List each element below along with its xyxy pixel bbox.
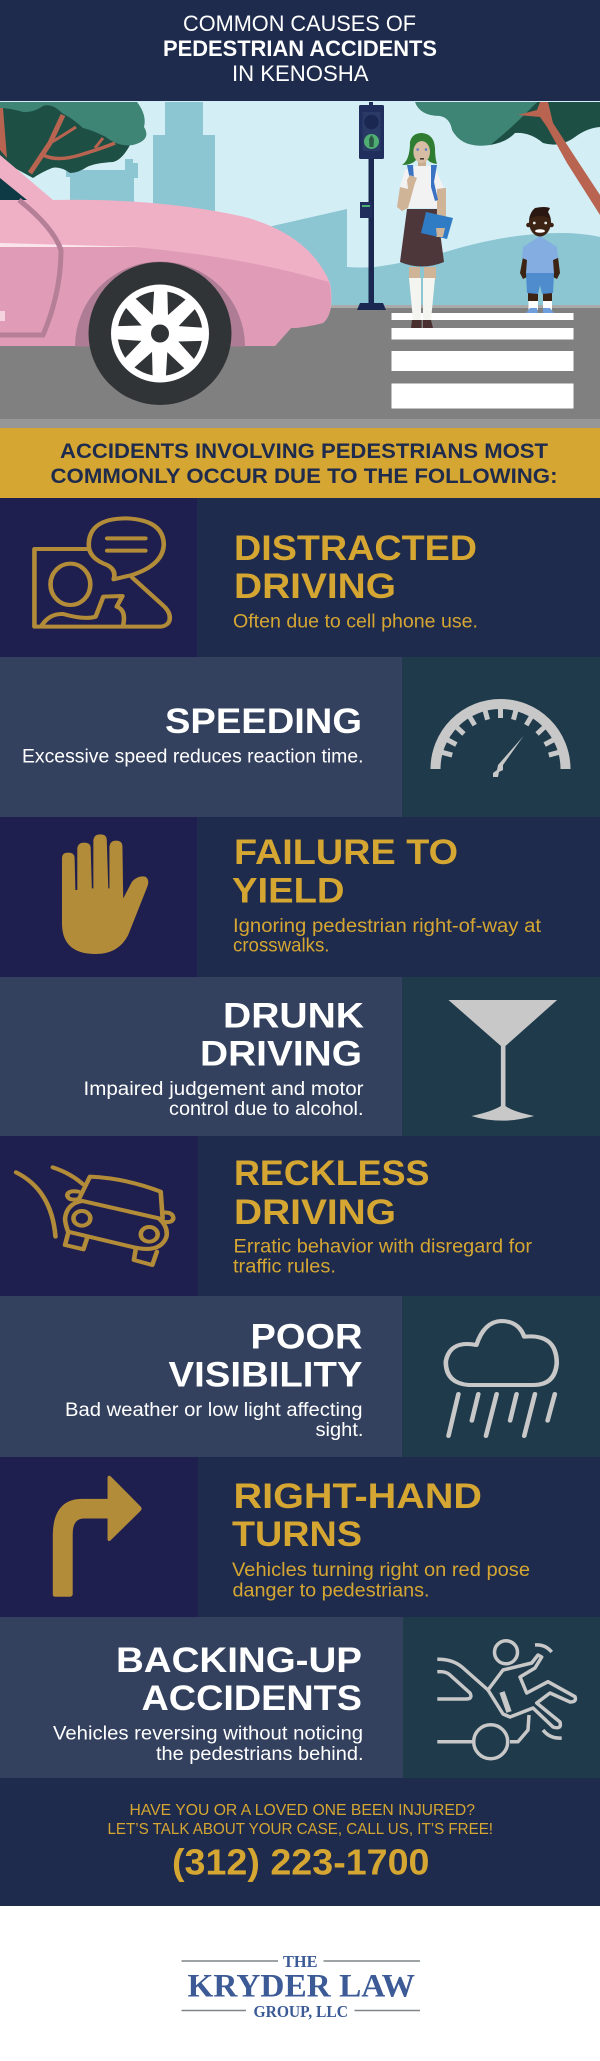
heading: distracted driving	[234, 529, 477, 606]
call to action text	[108, 1802, 493, 1838]
description: the pedestrians behind.	[156, 1744, 364, 1765]
heading: drunk driving	[200, 996, 364, 1074]
panel: backing-up accidents	[0, 1617, 600, 1778]
heading: distracted driving: DISTRACTED	[234, 529, 477, 568]
icon: rain cloud	[446, 1321, 557, 1436]
description: Often due to cell phone use.	[233, 612, 478, 632]
tree right	[415, 102, 600, 215]
title: IN KENOSHA	[232, 61, 369, 86]
boy pedestrian	[520, 207, 560, 313]
panel: poor visibility	[0, 1296, 600, 1457]
heading: backing-up accidents: ACCIDENTS	[142, 1679, 362, 1718]
heading: drunk driving: DRIVING	[200, 1034, 362, 1074]
logo: The Kryder Law Group	[182, 1952, 420, 2021]
icon: raised hand	[62, 834, 148, 954]
banner heading: COMMONLY OCCUR DUE TO THE FOLLOWING:	[50, 465, 558, 488]
woman pedestrian	[397, 133, 453, 328]
heading: right-hand turns: TURNS	[232, 1515, 362, 1554]
panel: distracted driving	[0, 498, 600, 657]
icon: swerving car	[16, 1167, 173, 1265]
description	[84, 1079, 364, 1120]
description: traffic rules.	[233, 1256, 336, 1278]
banner heading: ACCIDENTS INVOLVING PEDESTRIANS MOST	[60, 440, 548, 463]
traffic light	[357, 102, 386, 310]
heading: backing-up accidents	[116, 1641, 362, 1718]
description: Erratic behavior with disregard for	[234, 1236, 533, 1258]
heading: right-hand turns: RIGHT-HAND	[234, 1477, 482, 1516]
heading: right-hand turns	[232, 1477, 482, 1554]
icon: speedometer	[436, 704, 566, 777]
pink car	[0, 155, 331, 346]
description	[65, 1400, 364, 1441]
heading: distracted driving: DRIVING	[234, 567, 396, 606]
panel: reckless driving	[0, 1136, 600, 1296]
crosswalk	[392, 313, 574, 408]
heading: failure to yield: FAILURE TO	[234, 833, 458, 872]
gold banner	[0, 428, 600, 498]
heading: poor visibility: POOR	[250, 1318, 362, 1356]
heading: reckless driving: DRIVING	[234, 1193, 396, 1232]
phone number: (312) 223-1700	[172, 1842, 430, 1882]
description: danger to pedestrians.	[232, 1580, 430, 1602]
panel: drunk driving	[0, 977, 600, 1136]
header panel	[0, 0, 600, 102]
icon: distracted driver with speech bubble	[34, 518, 170, 627]
heading: poor visibility: VISIBILITY	[168, 1356, 362, 1394]
description	[233, 916, 542, 956]
description: control due to alcohol.	[169, 1099, 364, 1120]
title: PEDESTRIAN ACCIDENTS	[163, 36, 437, 61]
panel: failure to yield	[0, 817, 600, 977]
heading: backing-up accidents: BACKING-UP	[116, 1641, 362, 1680]
call to action text: HAVE YOU OR A LOVED ONE BEEN INJURED?	[130, 1802, 475, 1819]
description: sight.	[316, 1420, 364, 1441]
call to action text: LET’S TALK ABOUT YOUR CASE, CALL US, IT’S FREE!	[108, 1821, 493, 1838]
icon: martini glass	[448, 1000, 557, 1121]
heading: reckless driving	[234, 1154, 430, 1232]
description: Vehicles turning right on red pose	[232, 1560, 530, 1581]
logo: The Kryder Law Group: GROUP, LLC	[254, 2002, 348, 2021]
heading: drunk driving: DRUNK	[223, 996, 364, 1036]
description: Impaired judgement and motor	[84, 1079, 364, 1100]
tree left	[0, 102, 146, 178]
title: COMMON CAUSES OF	[183, 11, 416, 36]
illustration: street scene	[0, 101, 600, 428]
heading: speeding: SPEEDING	[165, 702, 362, 741]
buildings skyline	[66, 102, 600, 310]
description	[233, 1236, 533, 1278]
heading: failure to yield: YIELD	[232, 872, 344, 910]
heading: failure to yield	[232, 833, 458, 910]
icon: right turn arrow	[53, 1476, 142, 1597]
description	[232, 1560, 530, 1602]
panel: speeding	[0, 657, 600, 817]
icon: pedestrian struck by car	[437, 1641, 575, 1759]
car wheel	[88, 262, 232, 405]
logo: The Kryder Law Group: THE	[283, 1952, 318, 1971]
description: crosswalks.	[233, 936, 330, 956]
call to action panel	[0, 1778, 600, 1906]
description: Ignoring pedestrian right-of-way at	[233, 916, 542, 937]
heading: reckless driving: RECKLESS	[234, 1154, 430, 1193]
road	[0, 305, 600, 428]
heading: poor visibility	[168, 1318, 362, 1394]
logo: The Kryder Law Group: KRYDER LAW	[188, 1968, 415, 2004]
panel: right-hand turns	[0, 1457, 600, 1617]
description: Bad weather or low light affecting	[65, 1400, 362, 1421]
banner heading	[50, 440, 558, 488]
description	[53, 1724, 364, 1765]
description: Vehicles reversing without noticing	[53, 1724, 363, 1744]
description: Excessive speed reduces reaction time.	[22, 746, 364, 768]
title	[163, 11, 437, 86]
